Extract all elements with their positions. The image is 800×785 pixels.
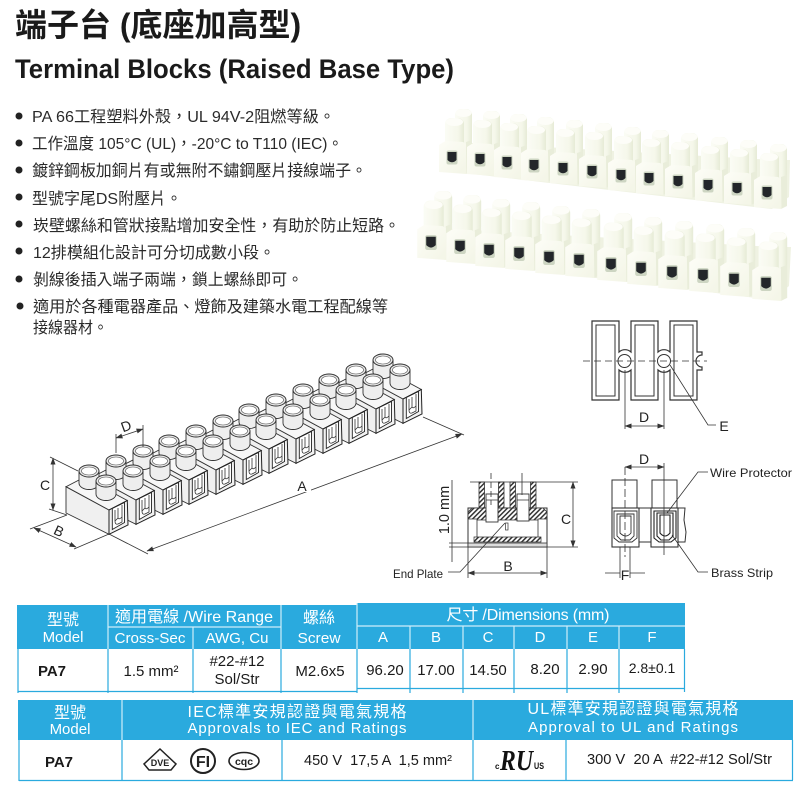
header labels: 適用電線 /Wire Range <box>115 608 273 626</box>
label: Wire Protector <box>667 466 792 513</box>
dimension D <box>116 417 143 453</box>
data row: 8.20 <box>530 661 560 678</box>
header labels: 尺寸 /Dimensions (mm) <box>446 606 610 624</box>
header labels: E <box>588 629 598 646</box>
header labels <box>43 606 657 647</box>
data row: M2.6x5 <box>295 663 345 680</box>
icon: cULus certification mark: US <box>534 761 544 771</box>
table: wire range, screw and dimensions <box>17 603 685 693</box>
product photo: two terminal block strips <box>417 109 791 301</box>
dimension C <box>40 457 78 515</box>
icon: cULus certification mark: c <box>495 762 500 771</box>
header labels: A <box>378 629 388 646</box>
data row: PA7 <box>38 663 66 680</box>
feature bullet list: PA 66工程塑料外殼，UL 94V-2阻燃等級。 <box>32 107 335 126</box>
header labels: 型號 <box>54 704 86 722</box>
data row: 2.8±0.1 <box>629 660 676 676</box>
dimension B <box>30 515 109 549</box>
dimension D: D <box>119 417 133 435</box>
label: Wire Protector: Wire Protector <box>710 466 792 480</box>
end section view drawing: C <box>561 511 571 527</box>
data row: 450 V 17,5 A 1,5 mm² <box>304 753 452 769</box>
photo: lower strip <box>417 191 791 301</box>
data row: 96.20 <box>366 662 404 679</box>
icon: FI certification mark <box>191 749 215 773</box>
data row: 300 V 20 A #22-#12 Sol/Str <box>587 752 772 768</box>
header labels: Model <box>50 721 90 738</box>
feature bullet list: 型號字尾DS附壓片。 <box>32 190 182 208</box>
feature bullet list: 工作溫度 105°C (UL)，-20°C to T110 (IEC)。 <box>32 135 343 153</box>
header labels: 螺絲 <box>303 609 335 627</box>
title: Chinese heading: 端子台 (底座加高型) <box>15 7 301 43</box>
header labels: Approvals to IEC and Ratings <box>188 720 406 737</box>
header labels: Model <box>43 629 83 646</box>
data row: 14.50 <box>469 662 507 679</box>
feature bullet list <box>16 107 400 337</box>
table: approvals and ratings <box>18 700 793 781</box>
label: Brass Strip: Brass Strip <box>711 566 773 580</box>
header labels: Approval to UL and Ratings <box>528 719 738 736</box>
header labels: 型號 <box>47 611 79 629</box>
plan view drawing with D and E dimensions: D <box>639 409 649 425</box>
dimension B: B <box>51 522 67 540</box>
plan view drawing with D and E dimensions: E <box>719 418 729 434</box>
feature bullet list: 接線器材。 <box>33 319 108 337</box>
isometric drawing of the terminal block with dimensions <box>30 354 464 554</box>
data row: #22-#12 <box>209 653 265 670</box>
data row: 17.00 <box>417 662 455 679</box>
header labels: UL標準安規認證與電氣規格 <box>528 700 738 718</box>
icon: DVE certification mark <box>144 749 176 770</box>
data row <box>45 752 772 771</box>
end section view drawing: B <box>503 558 513 574</box>
header labels: AWG, Cu <box>206 630 268 647</box>
front view drawing with wire protector and brass strip <box>605 451 792 583</box>
feature bullet list: 12排模組化設計可分切成數小段。 <box>33 244 275 262</box>
label: End Plate: End Plate <box>393 567 443 581</box>
icon: FI certification mark: FI <box>196 754 210 771</box>
label: End Plate <box>393 523 505 581</box>
header labels: IEC標準安規認證與電氣規格 <box>188 703 406 721</box>
header labels <box>50 700 738 738</box>
data row <box>38 653 676 688</box>
front view drawing with wire protector and brass strip: D <box>639 451 649 467</box>
header labels: F <box>647 629 657 646</box>
photo: upper strip <box>439 109 790 209</box>
icon: CQC certification mark <box>229 752 259 770</box>
header labels: D <box>535 629 546 646</box>
icon: DVE certification mark: DVE <box>151 758 169 768</box>
front view drawing with wire protector and brass strip: F <box>621 567 629 583</box>
data row: 1.5 mm² <box>123 663 179 680</box>
data row: PA7 <box>45 754 73 771</box>
header labels: C <box>483 629 494 646</box>
data row: Sol/Str <box>214 671 260 688</box>
feature bullet list: 適用於各種電器產品、燈飾及建築水電工程配線等 <box>33 297 388 316</box>
label: Brass Strip <box>672 535 773 580</box>
plan view drawing with D and E dimensions <box>583 321 729 434</box>
dimension A: A <box>297 478 307 494</box>
icon: cULus certification mark: RU <box>499 745 535 777</box>
label: 1.0 mm: 1.0 mm <box>437 486 453 534</box>
dimension C: C <box>40 477 50 493</box>
header labels: Cross-Sec <box>114 630 186 647</box>
table header background <box>17 603 685 649</box>
title: English heading: Terminal Blocks (Raised Base Type) <box>15 54 454 84</box>
dimension A <box>109 417 464 554</box>
table header background <box>18 700 793 740</box>
feature bullet list: 鍍鋅鋼板加銅片有或無附不鏽鋼壓片接線端子。 <box>32 162 367 180</box>
header labels: B <box>431 629 441 646</box>
feature bullet list: 崁壁螺絲和管狀接點增加安全性，有助於防止短路。 <box>33 216 400 235</box>
data row: 2.90 <box>578 661 608 678</box>
end section view drawing <box>393 473 578 581</box>
header labels: Screw <box>298 630 341 647</box>
icon: CQC certification mark: cqc <box>235 756 253 768</box>
feature bullet list: 剝線後插入端子兩端，鎖上螺絲即可。 <box>33 271 303 289</box>
